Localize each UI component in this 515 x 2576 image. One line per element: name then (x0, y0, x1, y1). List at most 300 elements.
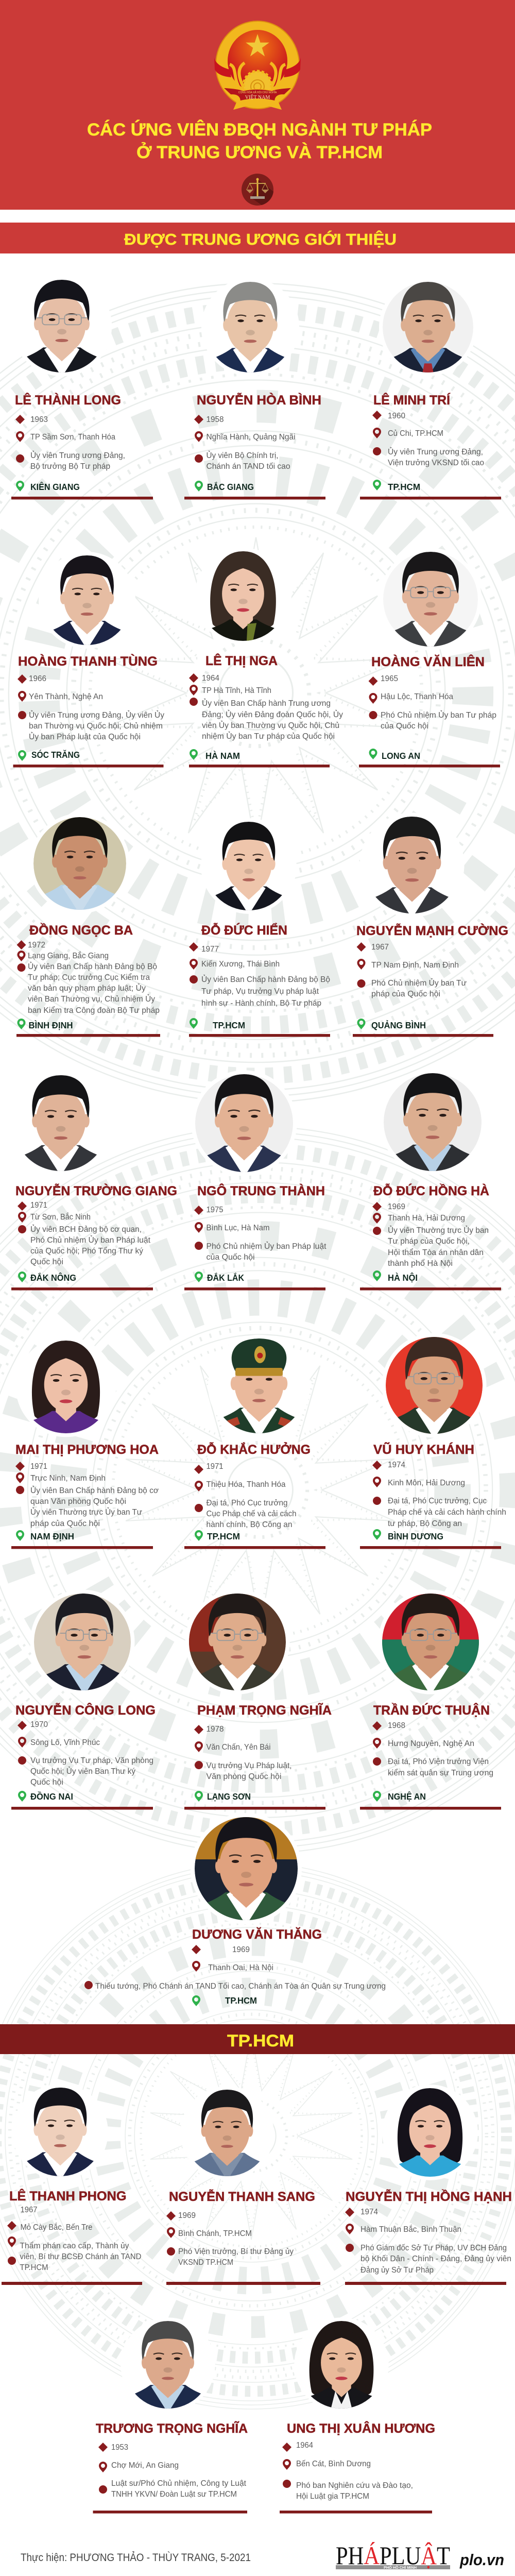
position (18, 1225, 151, 1266)
hometown (373, 1738, 474, 1749)
constituency (195, 1791, 251, 1802)
icon: national emblem of Vietnam: VIỆT NAM (245, 94, 270, 100)
portrait (379, 1069, 486, 1176)
constituency (190, 1018, 245, 1030)
position: ban Thường vụ Quốc hội; Chủ nhiệm (29, 722, 163, 731)
portrait (200, 818, 298, 915)
position: viên Ban Thường vụ, Chủ nhiệm Ủy (28, 994, 155, 1004)
position: Đại tá, Phó Cục trưởng, Cục (388, 1497, 487, 1505)
constituency: QUẢNG BÌNH (371, 1020, 426, 1030)
constituency: BÌNH DƯƠNG (388, 1531, 443, 1541)
constituency: KIÊN GIANG (30, 481, 80, 492)
divider (184, 1287, 325, 1290)
portrait (381, 1333, 487, 1438)
hometown (99, 2461, 179, 2472)
candidate card: Nguyễn Hòa Bình (184, 278, 325, 500)
hometown (373, 428, 443, 438)
birth year: 1969 (232, 1945, 250, 1954)
position: VKSND TP.HCM (178, 2258, 233, 2267)
name: LÊ THÀNH LONG (15, 392, 121, 408)
position: Ủy viên Trung ương Đảng, Ủy viên Ủy (29, 710, 164, 720)
hometown: Hưng Nguyên, Nghệ An (388, 1739, 474, 1748)
name: ĐỖ KHẮC HƯỞNG (197, 1442, 311, 1457)
birth year (345, 2208, 378, 2217)
section heading band: TP.HCM (0, 2024, 515, 2054)
constituency (18, 1272, 76, 1283)
position: Phó Chủ nhiệm Ủy ban Tư pháp (381, 710, 496, 720)
position: ban Kiểm tra Công đoàn Bộ Tư pháp (28, 1006, 160, 1015)
position (373, 1226, 489, 1268)
position: Pháp chế và cải cách hành chính (388, 1508, 506, 1517)
position (16, 451, 125, 471)
position: Bộ trưởng Bộ Tư pháp (30, 462, 110, 471)
birth year (194, 1725, 224, 1734)
name: MAI THỊ PHƯƠNG HOA (15, 1443, 159, 1457)
constituency: NGHỆ AN (388, 1791, 426, 1802)
birth year (189, 673, 219, 683)
constituency (195, 481, 254, 492)
divider (11, 1807, 153, 1809)
position (99, 2479, 247, 2499)
hometown: Củ Chi, TP.HCM (388, 429, 443, 438)
name: ĐỒNG NGỌC BA (29, 922, 133, 938)
divider (11, 1287, 153, 1290)
candidate card: Lê Thị Nga (189, 548, 343, 768)
hometown (18, 1737, 100, 1748)
position: Thiếu tướng, Phó Chánh án TAND Tối cao, Chánh án Tòa án Quân sự Trung ương (95, 1982, 386, 1991)
hometown: Nghĩa Hành, Quảng Ngãi (206, 433, 296, 442)
position: thành phố Hà Nội (388, 1259, 453, 1268)
divider (345, 2282, 506, 2285)
divider (16, 1034, 160, 1037)
hometown: Thanh Hà, Hải Dương (388, 1214, 465, 1223)
position: của Quốc hội; Phó Tổng Thư ký (30, 1247, 143, 1256)
name: NGUYỄN THANH SANG (169, 2189, 315, 2204)
position: Ủy viên Trung ương Đảng, (30, 451, 125, 460)
hometown (7, 2221, 93, 2232)
portrait (379, 548, 483, 651)
position: Đảng; Ủy viên Đảng đoàn Quốc hội, Ủy (202, 710, 343, 719)
hometown (18, 1212, 91, 1223)
position: Quốc hội (30, 1258, 63, 1266)
position: TP.HCM (20, 2263, 48, 2272)
birth year (194, 1206, 224, 1215)
position: Quốc hội (30, 1778, 63, 1787)
title: Ở TRUNG ƯƠNG VÀ TP.HCM (136, 143, 383, 162)
birth year (192, 1945, 250, 1954)
position: Chánh án TAND tối cao (206, 462, 290, 471)
divider (360, 1807, 501, 1809)
name: NGUYỄN HÒA BÌNH (197, 392, 321, 408)
position (18, 710, 164, 741)
portrait (377, 1589, 484, 1695)
constituency: TP.HCM (388, 482, 420, 492)
divider (353, 1034, 493, 1037)
birth year (372, 1202, 405, 1211)
divider (2, 2282, 142, 2285)
constituency: BẮC GIANG (207, 481, 254, 492)
section heading band: central nominees: ĐƯỢC TRUNG ƯƠNG GIỚI THIỆU (124, 230, 397, 248)
portrait (180, 2086, 274, 2180)
name: LÊ THANH PHONG (9, 2188, 127, 2204)
position: Ủy viên Thường trực Ủy ban (388, 1226, 489, 1235)
constituency: NAM ĐỊNH (30, 1531, 74, 1541)
birth year (372, 411, 405, 420)
position: Cục Pháp chế và cải cách (206, 1510, 297, 1518)
birth year (194, 415, 224, 424)
birth year: 1965 (381, 674, 398, 683)
hometown (195, 1741, 271, 1752)
hometown (190, 685, 271, 696)
hometown: Hàm Thuận Bắc, Bình Thuận (360, 2225, 461, 2234)
portrait (15, 1337, 117, 1438)
position: hành chính, Bộ Công an (206, 1520, 293, 1529)
birth year: 1974 (388, 1461, 405, 1469)
constituency: TP.HCM (207, 1531, 240, 1541)
constituency (373, 1270, 418, 1283)
birth year: 1967 (371, 943, 389, 952)
position: Đại tá, Phó Cục trưởng (206, 1499, 287, 1507)
position: Ủy viên Bộ Chính trị, (206, 451, 278, 460)
candidate card: Ngô Trung Thành (184, 1070, 327, 1290)
position: Hội thẩm Tòa án nhân dân (388, 1248, 484, 1257)
hometown: Mỏ Cày Bắc, Bến Tre (21, 2223, 93, 2232)
birth year (189, 942, 219, 954)
hometown (373, 1477, 465, 1487)
portrait (194, 548, 293, 646)
name: PHẠM TRỌNG NGHĨA (197, 1702, 332, 1718)
candidate card: Phạm Trọng Nghĩa (184, 1589, 332, 1809)
birth year (15, 1462, 47, 1471)
hometown (373, 1213, 465, 1224)
position: pháp của Quốc hội (30, 1519, 100, 1528)
portrait (190, 1813, 303, 1925)
birth year: 1964 (296, 2441, 313, 2450)
title (87, 120, 432, 162)
position: Vụ trưởng Vụ Pháp luật, (206, 1761, 291, 1770)
hometown: TP Sầm Sơn, Thanh Hóa (30, 433, 115, 442)
divider (360, 1546, 501, 1549)
constituency: LẠNG SƠN (207, 1791, 251, 1802)
candidate card: Đỗ Đức Hồng Hà (360, 1069, 501, 1290)
divider (184, 1807, 325, 1809)
constituency (16, 481, 80, 492)
position: kiểm sát quân sự Trung ương (388, 1769, 493, 1777)
hometown: Từ Sơn, Bắc Ninh (30, 1213, 91, 1222)
position: Phó Giám đốc Sở Tư Pháp, UV BCH Đảng (360, 2244, 507, 2252)
birth year (372, 1461, 405, 1470)
divider (360, 1287, 501, 1290)
position (167, 2247, 294, 2267)
constituency: ĐỒNG NAI (30, 1791, 73, 1802)
hometown: TP Nam Định, Nam Định (371, 961, 459, 970)
position: Ủy viên Ban Chấp hành Trung ương (202, 699, 331, 708)
birth year: 1977 (201, 945, 219, 954)
birth year: 1964 (202, 674, 219, 683)
divider (359, 765, 500, 768)
portrait (22, 280, 112, 376)
hometown: Chợ Mới, An Giang (111, 2461, 179, 2470)
birth year: 1974 (360, 2208, 378, 2216)
birth year: 1978 (206, 1725, 224, 1734)
constituency: HÀ NAM (205, 750, 240, 761)
divider (13, 765, 164, 768)
position: Phó Chủ nhiệm Ủy ban Pháp luật (206, 1242, 327, 1251)
position (16, 1486, 159, 1528)
position: viên Ủy ban Thường vụ Quốc hội, Chủ (202, 721, 339, 730)
constituency (357, 1019, 426, 1030)
name: HOÀNG THANH TÙNG (18, 653, 158, 669)
portrait (119, 2317, 216, 2413)
hometown (369, 692, 453, 704)
position: Thẩm phán cao cấp, Thành ủy (20, 2242, 129, 2250)
position: viên, Bí thư BCSĐ Chánh án TAND (20, 2252, 141, 2261)
hometown (167, 2227, 252, 2238)
portrait (11, 2084, 109, 2181)
name: NGUYỄN TRƯỜNG GIANG (15, 1183, 177, 1198)
birth year: 1966 (29, 674, 46, 683)
hometown: TP Hà Tĩnh, Hà Tĩnh (202, 686, 271, 695)
position (283, 2480, 413, 2501)
position: Ủy viên Thường trực Ủy ban Tư (30, 1507, 142, 1517)
position: Phó Chủ nhiệm Ủy ban Tư (371, 978, 467, 988)
birth year (18, 1720, 48, 1730)
portrait (379, 282, 473, 376)
position: Ủy viên Ban Chấp hành Đảng bộ Bộ (28, 962, 157, 971)
hometown (195, 1480, 286, 1492)
birth year: 1970 (30, 1720, 48, 1729)
constituency (373, 1529, 443, 1541)
divider (11, 497, 153, 500)
position (18, 962, 160, 1015)
candidate card: Đỗ Đức Hiển (189, 818, 330, 1037)
candidate card: Đỗ Khắc Hưởng (184, 1335, 325, 1549)
hometown (16, 431, 115, 442)
position: Ủy viên Trung ương Đảng, (388, 447, 483, 456)
name: NGUYỄN CÔNG LONG (15, 1702, 156, 1718)
constituency: ĐẮK LẮK (207, 1272, 244, 1283)
hometown: Thiệu Hóa, Thanh Hóa (206, 1480, 286, 1489)
birth year (356, 942, 389, 952)
divider (189, 765, 330, 768)
divider (184, 1546, 325, 1549)
candidate card: Ung Thị Xuân Hương (280, 2317, 435, 2513)
position (373, 1497, 506, 1528)
hometown: Yên Thành, Nghệ An (29, 692, 103, 701)
candidate card: Lê Minh Trí (360, 278, 501, 500)
portrait (184, 1589, 290, 1695)
position: Tư pháp, Vụ trưởng Vụ pháp luật (201, 987, 319, 996)
position: Vụ trưởng Vụ Tư pháp, Văn phòng (30, 1756, 153, 1765)
candidate card: Lê Thanh Phong (2, 2084, 142, 2285)
portrait (38, 552, 136, 650)
candidate card: Hoàng Văn Liên (359, 548, 500, 768)
position: Ủy viên Ban Chấp hành Đảng bộ Bộ (201, 975, 330, 984)
birth year (18, 1201, 47, 1211)
name: NGUYỄN THỊ HỒNG HẠNH (346, 2189, 512, 2204)
name: NGUYỄN MẠNH CƯỜNG (356, 923, 508, 938)
divider (93, 2511, 247, 2513)
section heading band: TP.HCM: TP.HCM (227, 2031, 294, 2050)
position (8, 2236, 141, 2272)
position: Viện trưởng VKSND tối cao (388, 459, 484, 467)
position (190, 975, 330, 1008)
portrait (191, 1070, 298, 1177)
portrait (200, 278, 300, 377)
website label: plo.vn (459, 2551, 504, 2569)
name: NGÔ TRUNG THÀNH (197, 1183, 325, 1198)
position: Ủy viên Ban Chấp hành Đảng bộ cơ (30, 1486, 159, 1495)
hometown (190, 959, 280, 970)
birth year: 1960 (388, 412, 405, 420)
candidate card: Mai Thị Phương Hoa (11, 1337, 159, 1549)
birth year: 1958 (206, 415, 224, 424)
icon: national emblem of Vietnam (214, 21, 301, 110)
candidate card: Nguyễn Mạnh Cường (353, 812, 508, 1037)
position: quan Văn phòng Quốc hội (30, 1497, 126, 1506)
divider (184, 497, 325, 500)
divider (166, 2282, 320, 2285)
position: văn bản quy phạm pháp luật; Ủy (28, 984, 146, 993)
candidate card: Đồng Ngọc Ba (16, 814, 160, 1037)
name: TRƯƠNG TRỌNG NGHĨA (96, 2420, 248, 2436)
logo: Pháp Luật newspaper: PHÁPLUẬT (336, 2541, 450, 2570)
birth year (18, 674, 46, 684)
birth year (16, 940, 45, 950)
name: TRẦN ĐỨC THUẬN (373, 1702, 490, 1718)
position (346, 2244, 511, 2275)
constituency: TP.HCM (213, 1020, 245, 1030)
candidate card: Nguyễn Thanh Sang (166, 2086, 320, 2285)
portrait (207, 1335, 311, 1438)
birth year (166, 2211, 196, 2221)
portrait (29, 814, 131, 914)
hometown: Bến Cát, Bình Dương (296, 2460, 371, 2468)
constituency (195, 1272, 244, 1283)
title: CÁC ỨNG VIÊN ĐBQH NGÀNH TƯ PHÁP (87, 120, 432, 140)
candidate card: Nguyễn Trường Giang (8, 1072, 177, 1290)
hometown (283, 2459, 371, 2470)
hometown: Hậu Lộc, Thanh Hóa (381, 692, 453, 701)
candidate card: Vũ Huy Khánh (360, 1333, 506, 1549)
position: bộ Khối Dân - Chính - Đảng, Đảng ủy viên (360, 2255, 511, 2263)
position: Văn phòng Quốc hội (206, 1772, 281, 1781)
hometown: Bình Chánh, TP.HCM (178, 2229, 252, 2238)
position: Phó Viện trưởng, Bí thư Đảng ủy (178, 2247, 294, 2256)
position: Ủy ban Pháp luật của Quốc hội (29, 732, 141, 741)
birth year: 1963 (30, 415, 48, 424)
section heading band: central nominees (0, 223, 515, 253)
constituency: ĐẮK NÔNG (30, 1272, 76, 1283)
hometown (195, 1222, 270, 1233)
birth year: 1969 (178, 2211, 196, 2220)
position: TNHH YKVN/ Đoàn Luật sư TP.HCM (111, 2490, 237, 2499)
position: Phó Chủ nhiệm Ủy ban Pháp luật (30, 1235, 151, 1245)
position: của Quốc hội (381, 722, 428, 731)
birth year: 1971 (30, 1462, 47, 1471)
portrait (359, 812, 465, 918)
portrait (30, 1589, 138, 1695)
name: LÊ THỊ NGA (205, 653, 278, 668)
birth year (372, 1721, 405, 1731)
position: Ủy viên BCH Đảng bộ cơ quan, (30, 1225, 142, 1234)
position: nhiệm Ủy ban Tư pháp của Quốc hội (202, 732, 335, 741)
constituency (18, 1019, 73, 1030)
birth year: 1969 (388, 1202, 405, 1211)
position: Hội Luật gia TP.HCM (296, 2492, 369, 2501)
hometown (346, 2224, 461, 2234)
hometown: Lạng Giang, Bắc Giang (28, 952, 109, 960)
position (195, 1499, 297, 1529)
position: hình sự - Hành chính, Bộ Tư pháp (201, 999, 321, 1008)
candidate card: Trương Trọng Nghĩa (93, 2317, 248, 2513)
credit line: Thực hiện: PHƯƠNG THẢO - THÙY TRANG, 5-2021 (21, 2552, 251, 2564)
position (195, 1761, 291, 1781)
position: pháp của Quốc hội (371, 990, 440, 998)
birth year (282, 2441, 313, 2452)
hometown (16, 1472, 106, 1483)
constituency (369, 749, 420, 761)
portrait (381, 2084, 479, 2181)
name: HOÀNG VĂN LIÊN (371, 654, 485, 669)
position (357, 978, 467, 998)
birth year (194, 1462, 224, 1474)
constituency (18, 749, 80, 761)
birth year: 1975 (206, 1206, 224, 1214)
hometown (357, 959, 459, 970)
name: ĐỖ ĐỨC HỒNG HÀ (373, 1183, 489, 1198)
logo: Pháp Luật newspaper: PHỐ HỒ CHÍ MINH (384, 2565, 417, 2570)
position: Đại tá, Phó Viện trưởng Viện (388, 1757, 489, 1766)
birth year: 1971 (30, 1201, 47, 1210)
icon: scales of justice (242, 174, 273, 206)
birth year (98, 2443, 128, 2452)
divider (11, 1546, 153, 1549)
position (18, 1756, 153, 1787)
birth year (15, 415, 48, 424)
position (369, 710, 496, 731)
candidate card: Hoàng Thanh Tùng (13, 552, 164, 768)
constituency (192, 1995, 257, 2006)
name: ĐỖ ĐỨC HIỂN (201, 922, 287, 938)
position: Phó ban Nghiên cứu và Đào tạo, (296, 2481, 413, 2490)
constituency (373, 1791, 426, 1802)
position: Tư pháp; Cục trưởng Cục Kiểm tra (28, 973, 150, 982)
position: tư pháp, Bộ Công an (388, 1519, 462, 1528)
portrait (8, 1072, 113, 1176)
candidate card: Nguyễn Công Long (11, 1589, 156, 1809)
name: VŨ HUY KHÁNH (373, 1442, 474, 1457)
divider (280, 2511, 432, 2513)
candidate card: Nguyễn Thị Hồng Hạnh (345, 2084, 512, 2285)
portrait (294, 2317, 389, 2413)
divider (189, 1034, 330, 1037)
candidate card: Lê Thành Long (11, 276, 153, 500)
name: UNG THỊ XUÂN HƯƠNG (287, 2420, 435, 2436)
constituency: SÓC TRĂNG (31, 749, 80, 760)
position: Quốc hội; Ủy viên Ban Thư ký (30, 1767, 135, 1776)
name: LÊ MINH TRÍ (373, 392, 451, 408)
hometown: Kinh Môn, Hải Dương (388, 1479, 465, 1487)
constituency: TP.HCM (225, 1995, 257, 2006)
constituency (16, 1530, 74, 1541)
hometown: Thanh Oai, Hà Nội (208, 1963, 273, 1972)
hometown: Văn Chấn, Yên Bái (206, 1743, 271, 1752)
constituency (195, 1530, 240, 1541)
birth year: 1968 (388, 1721, 405, 1730)
position (373, 1757, 493, 1777)
position: của Quốc hội (206, 1253, 254, 1262)
